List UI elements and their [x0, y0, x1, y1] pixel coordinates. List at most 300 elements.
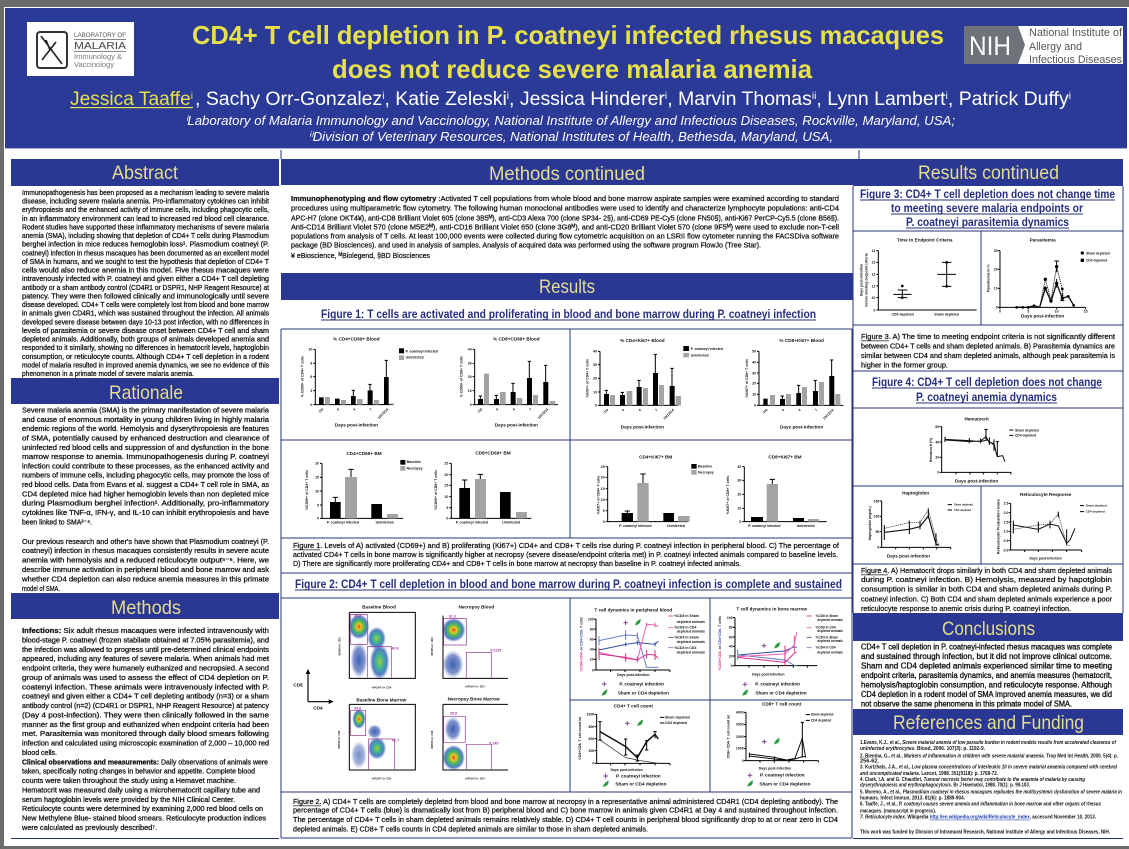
chart: reticulocyte response: CD4 depleted	[1086, 510, 1105, 514]
authors: i	[507, 91, 509, 102]
line chart: T cell dynamics in bone marrow: depleted animals	[817, 618, 843, 622]
bar chart: CD4+Ki67+ BM	[597, 455, 714, 528]
plot: Necropsy Bone Marrow: Necropsy Bone Marrow	[448, 696, 500, 701]
text block: methods: manner as the first group and euthanized when endpoint criteria had been	[22, 720, 269, 729]
logo: NIH: National Institute of	[1029, 27, 1123, 39]
authors: i	[946, 91, 948, 102]
bar chart: CD8+Ki67+ blood: 7	[814, 408, 818, 412]
authors: , Katie Zeleski	[384, 89, 507, 110]
text block: abstract: erythropoiesis and the enhanced activity of immune cells, including phagocytic cells,	[22, 205, 269, 214]
section heading: Methods: Methods	[111, 597, 181, 619]
section heading: Methods	[11, 593, 279, 619]
line chart: CD8+ T cell count: 1000	[736, 747, 744, 751]
bar chart: CD4+CD69+ blood: 0	[336, 407, 340, 412]
plot: Necropsy Bone Marrow: <APC/H7-A>: CD4	[465, 777, 485, 780]
text block: methods continued: Immunophenotyping and flow cytometry :Activated T cell populations from whole blood and bone marrow aspirate samples were examined according to standard	[291, 194, 839, 203]
chart: hematocrit: Hematocrit (%)	[929, 438, 933, 462]
bar chart: CD8+CD69+ blood: 7	[528, 407, 533, 412]
line chart: CD8+ T cell count: 4000	[736, 711, 744, 715]
line chart: T cell dynamics in bone marrow: 80	[729, 626, 733, 630]
text block: methods continued: package (BD Biosciences). and used in analysis of samples. Analysis of acquired data was performed using the software program FlowJo (Tree Star).	[291, 240, 761, 250]
logo: Laboratory of Malaria: Immunology &	[74, 54, 122, 61]
bar chart: CD4+CD69+ BM: 0	[317, 517, 319, 521]
line chart: T cell dynamics in bone marrow: Days post-infection	[752, 672, 784, 676]
section heading: Abstract: Abstract	[112, 162, 179, 184]
bar chart: CD4+CD69+ BM: 10	[315, 489, 319, 493]
text block: methods: antibody control (n=2) (CD4R1 or DSPR1, NHP Reagent Resource) at patency	[22, 701, 269, 710]
bar chart: CD4+CD69+ blood	[300, 336, 438, 428]
line chart: T cell dynamics in bone marrow: %CD4 in Sham	[816, 635, 838, 639]
bar chart: CD4+CD69+ BM: Necropsy	[407, 466, 423, 470]
chart: haptoglobin: CD4 depleted	[954, 508, 971, 512]
authors: ii	[812, 91, 816, 102]
line chart: CD4+ T cell count: Sham or CD4 depletion	[615, 782, 667, 787]
bar chart: CD4+CD69+ BM: 5	[317, 503, 319, 507]
chart: haptoglobin: Sham depleted	[954, 503, 973, 507]
text block: references and funding: 6. Taaffe, J., et al., P. coatneyi causes severe anemia and inflammation in bone marrow and other organs of rhesus	[860, 802, 1101, 808]
section heading: Methods continued	[281, 159, 853, 185]
text block: methods: the infection was allowed to progress until pre-determined clinical endpoints	[22, 645, 269, 654]
bar chart: CD8+Ki67+ BM: 0	[739, 520, 741, 524]
bar chart: CD8+Ki67+ BM: Uninfected	[797, 524, 815, 528]
text block: methods: blood-stage P. coatneyi (frozen stabilate obtained at 7.05% parasitemia), and	[22, 635, 269, 644]
line chart: T cell dynamics in bone marrow: %CD8 in Sham	[816, 614, 838, 618]
line chart: T cell dynamics in peripheral blood: depleted animals	[677, 640, 705, 644]
plot: Necropsy Blood: <APC/H7-A>: CD4	[465, 686, 485, 689]
text block: methods: New Methylene Blue- stained blood smears. Reticulocyte production indices	[22, 814, 266, 822]
bar chart: CD8+Ki67+ BM: 40	[737, 465, 741, 469]
bar chart: CD4+CD69+ blood: -7/0	[317, 407, 324, 415]
text block: abstract: disease, including severe malaria anemia. Pro-inflammatory cytokines can inhibit	[22, 197, 269, 206]
affiliations	[185, 113, 955, 144]
text block: methods: group of animals was used to assess the effect of CD4 depletion on P.	[22, 673, 269, 682]
authors: i	[1069, 91, 1071, 102]
bar chart: CD8+CD69+ BM	[434, 450, 531, 525]
plot: Necropsy Bone Marrow: 0.145	[489, 742, 498, 746]
text block: rationale: numbers of immune cells, including phagocytic cells, may promote the loss of	[22, 471, 269, 480]
bar chart: CD4+Ki67+ BM: 0	[603, 520, 605, 524]
line chart: T cell dynamics in bone marrow	[718, 606, 843, 696]
text block: abstract: developed severe disease between days 10-13 post infection, with no differences in	[22, 317, 269, 326]
text block: methods continued: ¥ eBioscience, ᴹBiolegend, §BD Biosciences	[291, 251, 430, 260]
bar chart: CD4+CD69+ BM: %CD69+ of CD4+ T cells	[305, 470, 309, 510]
plot: Baseline Blood	[339, 604, 415, 689]
bar chart: CD8+Ki67+ blood: 20	[752, 382, 756, 386]
bar chart: CD8+Ki67+ blood: 40	[752, 361, 756, 365]
bar chart: CD4+CD69+ BM: Uninfected	[376, 521, 394, 525]
plot: Baseline Bone Marrow: 33.6	[354, 706, 361, 710]
chart: parasitemia: Days post-infection	[1021, 314, 1064, 319]
Figure 3 and 4 panel grid	[853, 186, 1123, 613]
authors: , Lynn Lambert	[816, 89, 946, 110]
bar chart: CD4+Ki67+ blood: -7/0	[602, 408, 609, 415]
chart: parasitemia: Parasitemia in %	[986, 264, 990, 292]
section heading: Conclusions: Conclusions	[942, 618, 1035, 640]
plot: Baseline Blood: <BV605-A>: CD8	[339, 637, 342, 656]
chart: time to endpoint criteria: Time to Endpoint Criteria	[897, 238, 953, 243]
chart: haptoglobin: 100	[874, 515, 879, 519]
caption: Figure 2: Figure 2. A) CD4+ T cells are completely depleted from blood and bone marrow at necropsy in a representative animal administered CD4R1 (CD4 depleting antibody). The	[293, 797, 838, 806]
bar chart: CD8+Ki67+ blood: %Ki67+ of CD8+ T cells	[745, 359, 749, 398]
bar chart: CD4+CD69+ blood: % CD69+ of CD4+ T cells	[300, 356, 304, 397]
text block: references and funding: 4. Clark, I.A. and G. Chaudhri, Tumour necrosis factor may contribute to the anaemia of malaria by causing	[860, 777, 1086, 783]
line chart: CD8+ T cell count: 0	[742, 759, 744, 763]
plot: Baseline Bone Marrow	[338, 697, 415, 780]
bar chart: CD8+CD69+ blood: Days post-infection	[495, 423, 538, 428]
bar chart: CD4+CD69+ BM: 15	[315, 476, 319, 480]
arrows: CD8 / CD4 axes: CD8	[293, 683, 303, 688]
text block: methods continued	[291, 194, 839, 260]
plot: Baseline Blood: 39.8	[354, 614, 361, 618]
text block: methods: coatenyi infection. These animals were intravenously infected with P.	[22, 682, 269, 691]
heading: Figure 3: P. coatneyi parasitemia dynamics	[906, 215, 1069, 229]
bar chart: CD4+Ki67+ BM: 5	[603, 509, 605, 513]
arrows: CD8 / CD4 axes: CD4	[313, 705, 323, 710]
text block: rationale: model of SMA.	[22, 584, 60, 593]
chart: parasitemia: CD4 depleted	[1086, 259, 1107, 263]
bar chart: CD8+CD69+ blood: 20	[468, 375, 472, 379]
bar chart: CD4+CD69+ blood: 0	[310, 403, 312, 407]
chart: reticulocyte response: 2.5	[1003, 502, 1008, 506]
text block: methods: serum haptoglobin levels were provided by the NIH Clinical Center.	[22, 795, 235, 804]
line chart: CD8+ T cell count: Sham or CD4 depletion	[759, 781, 811, 786]
line chart: CD8+ T cell count: CD8+ CD4- T cell count /ul	[727, 715, 731, 758]
chart: reticulocyte response	[996, 492, 1107, 561]
plot: Necropsy Bone Marrow: <BV605-A>: CD8	[431, 730, 434, 749]
chart: parasitemia: 0	[996, 306, 998, 310]
bar chart: CD8+Ki67+ BM: 10	[737, 507, 741, 511]
line chart: T cell dynamics in peripheral blood: 100	[588, 617, 594, 621]
chart: hematocrit: Days post-infection	[955, 478, 998, 483]
line chart: T cell dynamics in peripheral blood: depleted animals	[677, 620, 705, 624]
line chart: T cell dynamics in peripheral blood: 60	[590, 638, 594, 642]
text block: abstract: of SMA in humans, and we sought to test the hypothesis that depletion of CD4+ T	[22, 257, 270, 266]
chart: time to endpoint criteria: 13	[871, 261, 875, 265]
logo: Laboratory of Malaria: LABORATORY OF	[74, 33, 126, 39]
chart: time to endpoint criteria: 14	[871, 249, 875, 253]
bar chart: CD8+Ki67+ blood: Days post-infection	[780, 425, 823, 430]
text block: abstract	[22, 188, 270, 378]
text block: methods: Reticulocyte counts were determined by examining 2,000 red blood cells on	[22, 804, 263, 813]
chart: hematocrit: 0	[937, 471, 939, 475]
bar chart: CD8+CD69+ blood: % CD8+CD69+ Blood	[493, 336, 540, 341]
text block: abstract: patency. They were then followed clinically and immunologically until severe	[22, 291, 269, 300]
text block: abstract: responded to it similarly, showing no differences in hematocrit levels, haptoglobin	[22, 343, 269, 352]
heading: Figure 4: P. coatneyi anemia dynamics	[916, 390, 1057, 404]
plot: Baseline Blood: 40.9	[391, 647, 398, 651]
bar chart: CD4+CD69+ BM: 20	[315, 462, 319, 466]
text block: methods: taken, specifically noting changes in behavior and appetite. Complete blood	[22, 767, 255, 776]
affiliations: ⁱⁱDivision of Veterinary Resources, National Institutes of Health, Bethesda, Maryland, USA,	[308, 129, 833, 144]
bar chart: CD8+CD69+ BM: 25	[444, 462, 448, 466]
bar chart: CD4+Ki67+ blood: 10/13/14	[663, 408, 675, 421]
line chart: CD4+ T cell count: 800	[589, 725, 594, 729]
line chart: T cell dynamics in peripheral blood: %CD4 in CD4	[674, 646, 696, 650]
plot: Baseline Blood: <APC/H7-A>: CD4	[371, 686, 392, 689]
line chart: CD8+ T cell count	[727, 702, 833, 787]
line chart: T cell dynamics in bone marrow: %CD8 in CD4	[816, 626, 836, 630]
chart: reticulocyte response: 0.5	[1003, 539, 1008, 543]
text block: abstract: Immunopathogenesis has been proposed as a mechanism leading to severe malaria	[22, 188, 269, 197]
text block: rationale: Our previous research and other's have shown that Plasmodium coatneyi (P.	[22, 537, 269, 546]
caption: Figure 2: The percentage of CD4+ T cells in sham depleted animals remains relatively stable. D) CD4+ T cell counts in peripheral blood significantly drop to at or near zero in CD4	[293, 815, 838, 824]
chart: haptoglobin: Haptoglobin	[902, 491, 929, 496]
text block: rationale: and cause of enormous mortality in young children living in highly malaria	[22, 415, 269, 424]
plot: Baseline Bone Marrow: 41.7	[392, 738, 399, 742]
bar chart: CD4+Ki67+ blood: 0	[595, 404, 597, 408]
chart: time to endpoint criteria: 11	[872, 284, 875, 288]
bar chart: CD4+Ki67+ blood	[586, 338, 723, 430]
chart: hematocrit: Sham depleted	[1015, 428, 1039, 432]
text block: abstract: Rodent studies have supported these inflammatory mechanisms of severe malaria	[22, 222, 269, 232]
chart: reticulocyte response: 1.0	[1003, 530, 1008, 534]
heading: Figure 3: to meeting severe malaria endpoints or	[891, 201, 1083, 215]
logo: NIH: Allergy and	[1029, 41, 1082, 53]
text block: rationale: cytokines like TNF-α, IFN-γ, and IL-10 can inhibit erythropoiesis and have	[22, 508, 269, 517]
text block: methods: (Day 4 post-infection). They were then clinically followed in the same	[22, 710, 269, 719]
line chart: T cell dynamics in bone marrow: depleted animals	[817, 629, 843, 633]
line chart: T cell dynamics in bone marrow: T cell dynamics in bone marrow	[736, 606, 807, 611]
chart: hematocrit	[929, 417, 1039, 483]
line chart: T cell dynamics in peripheral blood: 40	[590, 648, 594, 652]
bar chart: CD4+Ki67+ blood: 4	[638, 408, 642, 412]
caption: Figure 4	[861, 566, 1112, 613]
plot: Baseline Bone Marrow: <APC/H7-A>: CD4	[371, 777, 392, 780]
text block: abstract: cells would also reduce anemia in this model. Five rhesus macaques were	[22, 266, 269, 275]
text block: references and funding: 7. Reticulocyte index. Wikipedia http://en.wikipedia.org/wiki/Reticulocyte_index, accessed November 10, 2013.	[860, 815, 1096, 821]
chart: haptoglobin: 50	[875, 530, 879, 534]
text block: methods: appeared, including any features of severe malaria. When animals had met	[22, 654, 269, 663]
line chart: T cell dynamics in peripheral blood: 0	[592, 668, 594, 672]
caption: Figure 2	[293, 797, 838, 833]
chart: parasitemia: 20	[994, 268, 998, 272]
plot: Baseline Blood: Baseline Blood	[362, 604, 396, 609]
section heading: Rationale: Rationale	[109, 382, 183, 404]
caption: Figure 2: percentage of CD4+ T cells (blue) is dramatically lost from B) peripheral blood and C) bone marrow in animals given CD4R1 at Day 4 and sustained throughout infection.	[293, 806, 838, 815]
text block: rationale: CD4 depleted mice had higher hemoglobin levels than non depleted mice	[22, 489, 269, 498]
chart: parasitemia: Parasitemia	[1030, 238, 1056, 243]
bar chart: CD8+Ki67+ BM: P. coatneyi infected	[748, 524, 780, 528]
bar chart: CD4+CD69+ blood: 10	[308, 348, 312, 352]
text block: methods	[21, 626, 269, 832]
plot: Baseline Bone Marrow: <BV605-A>: CD8	[338, 730, 341, 749]
line chart: CD4+ T cell count	[578, 704, 690, 787]
plot: Necropsy Blood: 91.3	[449, 615, 456, 619]
text block: references and funding: humans. Infect Immun, 2013. 81(6): p. 1889-904.	[860, 796, 965, 802]
bar chart: CD8+Ki67+ blood: % CD8+Ki67+ Blood	[779, 338, 824, 343]
bar chart: CD8+CD69+ blood: 0	[470, 403, 472, 407]
line chart: CD4+ T cell count: 200	[589, 749, 594, 753]
line chart: T cell dynamics in peripheral blood: 20	[590, 658, 594, 662]
chart: time to endpoint criteria: Days post-infection	[860, 264, 864, 296]
line chart: CD4+ T cell count: 1000	[587, 713, 594, 717]
bar chart: CD4+Ki67+ BM: 15	[601, 487, 605, 491]
title: does not reduce severe malaria anemia	[332, 54, 813, 84]
chart: parasitemia: 10	[994, 287, 998, 291]
text block: conclusions: and sustained through infection, but it did not improve clinical outcome.	[861, 652, 1112, 661]
bar chart: CD8+CD69+ BM: 0	[446, 517, 448, 521]
bar chart: CD4+Ki67+ BM: P. coatneyi infected	[619, 524, 651, 528]
text block: rationale	[21, 406, 269, 593]
text block: abstract: berghei infection in mice reduces hemoglobin loss¹. Plasmodium coatneyi (P.	[22, 240, 269, 249]
line chart: T cell dynamics in bone marrow: P. coatneyi infection	[755, 682, 800, 687]
bar chart: CD8+Ki67+ BM: %Ki67+ of CD8+ T cells	[726, 476, 730, 514]
text block: rationale: uninfected red blood cells and suppression of and dysfunction in the bone	[22, 443, 269, 452]
line chart: T cell dynamics in bone marrow: 100	[727, 616, 733, 620]
bar chart: CD4+Ki67+ blood: Days post-infection	[621, 425, 664, 430]
plot: Necropsy Blood: 0.0115	[490, 649, 501, 653]
bar chart: CD4+CD69+ BM	[305, 451, 423, 525]
bar chart: CD8+CD69+ blood: 30	[468, 362, 472, 366]
line chart: T cell dynamics in bone marrow: Sham or CD4 depletion	[755, 690, 807, 695]
chart: parasitemia: Sham depleted	[1086, 251, 1110, 255]
line chart: T cell dynamics in peripheral blood: %CD4 in Sham	[674, 635, 699, 639]
line chart: T cell dynamics in bone marrow: 60	[729, 635, 733, 639]
bar chart: CD8+CD69+ BM: CD8+CD69+ BM	[475, 450, 511, 455]
text block: methods: Hematocrit was measured daily using a microhematocrit capillary tube and	[22, 785, 260, 794]
heading: Figure 3	[860, 187, 1115, 229]
chart: time to endpoint criteria: before meeting endpoint criteria	[865, 253, 869, 307]
authors: i	[382, 91, 384, 102]
caption: Figure 1: activated CD4+ T cells in bone marrow is significantly higher at necropsy (severe disease/endpoint criteria met) in P. coatneyi infected animals compared to baseline levels.	[293, 550, 838, 559]
line chart: T cell dynamics in bone marrow: 0	[731, 664, 733, 668]
text block: rationale: red blood cells. Data from Evans et al. suggest a CD4+ T cell role in SMA, as	[22, 480, 269, 489]
bar chart: CD8+CD69+ BM: %CD69+ of CD8+ T cells	[434, 470, 438, 510]
line chart: T cell dynamics in peripheral blood: %CD8+CD4- or CD4+CD8- T cells	[580, 617, 584, 672]
line chart: T cell dynamics in peripheral blood: Sham or CD4 depletion	[618, 690, 669, 695]
bar chart: CD8+Ki67+ blood: -7/0	[762, 408, 769, 415]
logo: Laboratory of Malaria	[27, 22, 134, 76]
bar chart: CD8+Ki67+ BM: CD8+Ki67+ BM	[768, 455, 802, 460]
bar chart: CD8+CD69+ blood: 40	[468, 348, 472, 352]
caption: Figure 4: during P. coatneyi infection. B) Hemolysis, measured by hapotglobin	[861, 575, 1112, 584]
text block: abstract: model of malaria resulted in improved anemia dynamics, we see no evidence of this	[22, 360, 269, 369]
text block: methods: met. Parasitemia was monitored through daily blood smears following	[22, 729, 269, 738]
text block: abstract: depleted animals. Additionally, both groups of animals developed anemia and	[22, 334, 269, 344]
bar chart: CD8+Ki67+ blood: 0	[754, 404, 756, 408]
line chart: T cell dynamics in peripheral blood	[580, 607, 705, 696]
bar chart: CD4+CD69+ blood: P. coatneyi infected	[406, 349, 438, 353]
Figure 1 panel grid	[281, 329, 852, 575]
bar chart: CD4+Ki67+ blood: P. coatneyi infected	[691, 347, 723, 351]
bar chart: CD8+CD69+ BM: 15	[444, 484, 448, 488]
text block: abstract: coatneyi) infection in rhesus macaques has been documented as an excellent model	[22, 248, 269, 257]
logo: Laboratory of Malaria: MALARIA	[74, 41, 126, 52]
bar chart: CD4+CD69+ blood: % CD4+CD69+ Blood	[333, 336, 380, 341]
plot: Necropsy Bone Marrow: 25.8	[450, 711, 457, 715]
text block: rationale: infection could contribute to these processes, as the enhanced activity and	[22, 461, 269, 470]
chart: time to endpoint criteria: 0	[873, 308, 875, 312]
authors: , Sachy Orr-Gonzalez	[195, 89, 378, 110]
bar chart: CD8+Ki67+ BM	[726, 455, 827, 528]
authors	[70, 89, 1071, 110]
caption: Figure 1: D) There are significantly more proliferating CD4+ and CD8+ T cells in bone marrow at necropsy than baseline in P. coatneyi infected animals.	[293, 559, 741, 568]
line chart: CD8+ T cell count: Days post-infection	[759, 766, 791, 770]
text block: methods: coatneyi and given either a CD4+ T cell depleting antibody (n=3) or a sham	[22, 692, 269, 701]
chart: parasitemia: 5	[1027, 310, 1029, 314]
text block: methods continued: populations from analysis of T cells. At least 100,000 events were collected during flow cytometric acquisition on an LSRII flow cytometer running the FACSDiva software	[291, 232, 839, 240]
chart: reticulocyte response: 1.5	[1003, 520, 1008, 524]
chart: time to endpoint criteria	[860, 238, 977, 317]
caption: Figure 3: similar between CD4 and sham depleted animals, although peak parasitemia is	[861, 351, 1115, 360]
chart: reticulocyte response: Sham depleted	[1086, 504, 1107, 508]
section heading: References and Funding	[853, 709, 1123, 735]
section heading: Results continued: Results continued	[918, 162, 1059, 184]
chart: time to endpoint criteria: 10	[871, 296, 875, 300]
text block: conclusions: not observe the same phenomena in this primate model of SMA.	[861, 700, 1072, 708]
bar chart: CD4+CD69+ blood: 6	[310, 375, 312, 379]
text block: conclusions	[861, 642, 1112, 708]
chart: time to endpoint criteria: Sham depleted	[934, 313, 959, 317]
caption: Figure 1	[293, 541, 840, 568]
text block: methods continued: Anti-CD14 Brilliant Violet 570 (clone M5E2ᴹ), anti-CD16 Brilliant Violet 650 (clone 3G8ᴹ), and anti-CD20 Brilliant Violet 570 (clone 9F5ᴹ) were used to exclude non-T-cell	[291, 222, 839, 232]
bar chart: CD4+CD69+ BM: P. coatneyi infected	[327, 521, 359, 525]
text block: references and funding: macaques. (manuscript in progress).	[860, 809, 936, 815]
text block: abstract: levels of parasitemia or severe disease onset between CD4+ T cell and sham	[22, 326, 269, 335]
bar chart: CD8+CD69+ blood	[460, 336, 558, 428]
plot: Baseline Bone Marrow: Baseline Bone Marrow	[356, 697, 407, 702]
title	[192, 20, 944, 84]
bar chart: CD8+Ki67+ blood: 50	[752, 350, 756, 354]
plot: Necropsy Blood: <BV605-A>: CD8	[431, 637, 434, 656]
line chart: T cell dynamics in peripheral blood: P. coatneyi infection	[619, 681, 664, 686]
chart: parasitemia: 15	[1084, 310, 1088, 314]
text block: rationale: been linked to SMA²⁻⁴.	[22, 517, 92, 526]
bar chart: CD8+CD69+ blood: 0	[495, 407, 499, 412]
chart: time to endpoint criteria: 12	[871, 273, 875, 277]
text block: references and funding: and uncomplicated malaria. Lancet, 1998. 351(9118): p. 1768-72.	[860, 771, 998, 777]
bar chart: CD4+CD69+ BM: CD4+CD69+ BM	[346, 451, 382, 456]
bar chart: CD4+Ki67+ BM: Baseline	[698, 464, 712, 468]
bar chart: CD8+Ki67+ blood: 30	[752, 371, 756, 375]
line chart: T cell dynamics in peripheral blood: depleted animals	[677, 651, 705, 655]
heading: Figure 1: Figure 1: T cells are activated and proliferating in blood and bone marrow during P. coatneyi infection	[321, 307, 816, 321]
text block: conclusions: endpoint criteria, parasitemia dynamics, and anemia measures (hematocrit,	[861, 671, 1112, 680]
title: CD4+ T cell depletion in P. coatneyi infected rhesus macaques	[192, 20, 944, 50]
Figure 2 panel grid	[281, 573, 852, 838]
text block: rationale: anemia with hemolysis and a reduced reticulocyte output⁵⁻⁶. Here, we	[22, 556, 269, 564]
section heading: Results continued	[853, 159, 1123, 186]
arrows: CD8 / CD4 axes	[293, 669, 334, 710]
text block: rationale: whether CD4 depletion can also reduce anemia measures in this primate	[21, 575, 269, 584]
text block: abstract: antibody or a sham antibody control (CD4R1 or DSPR1, NHP Reagent Resource) at	[22, 283, 269, 292]
bar chart: CD4+Ki67+ BM: 20	[601, 476, 605, 480]
section heading: Rationale	[11, 378, 279, 404]
bar chart: CD4+Ki67+ blood: % CD4+Ki67+ Blood	[620, 338, 665, 343]
bar chart: CD8+CD69+ blood: % CD69+ of CD8+ T cells	[460, 356, 464, 397]
text block: methods: counts were taken throughout the study using a Hemavet machine.	[22, 776, 236, 785]
bar chart: CD4+Ki67+ BM: Uninfected	[667, 524, 685, 528]
text block: rationale: describe immune activation in peripheral blood and bone marrow and ask	[22, 565, 269, 574]
authors: i	[191, 91, 193, 102]
line chart: CD4+ T cell count: Sham depleted	[665, 715, 690, 719]
bar chart: CD8+Ki67+ blood: 10	[752, 393, 756, 397]
chart: reticulocyte response: 0.0	[1003, 548, 1008, 552]
flow cytometry plots	[293, 604, 508, 780]
line chart: T cell dynamics in bone marrow: %CD8+CD4- or CD4+CD8- T cells	[718, 616, 722, 671]
bar chart: CD4+Ki67+ BM: Necropsy	[698, 470, 714, 474]
bar chart: CD4+Ki67+ blood: 0	[621, 408, 625, 412]
chart: hematocrit: Hematocrit	[964, 417, 989, 422]
header banner	[5, 8, 1127, 159]
section heading: Conclusions	[853, 613, 1123, 641]
text block: abstract: in animals given CD4R1, which was sustained throughout the infection. All animals	[22, 309, 269, 318]
text block: references and funding: 2. Biemba, G., et al., Markers of inflammation in children with severe malarial anaemia. Trop Med Int Health, 2000. 5(4): p.	[860, 754, 1118, 760]
line chart: CD8+ T cell count: 2000	[736, 735, 744, 739]
bar chart: CD4+CD69+ blood: 10/13/14	[377, 407, 389, 420]
text block: methods: were calculated as previously described⁷.	[21, 823, 157, 832]
line chart: T cell dynamics in bone marrow: depleted animals	[817, 650, 843, 654]
